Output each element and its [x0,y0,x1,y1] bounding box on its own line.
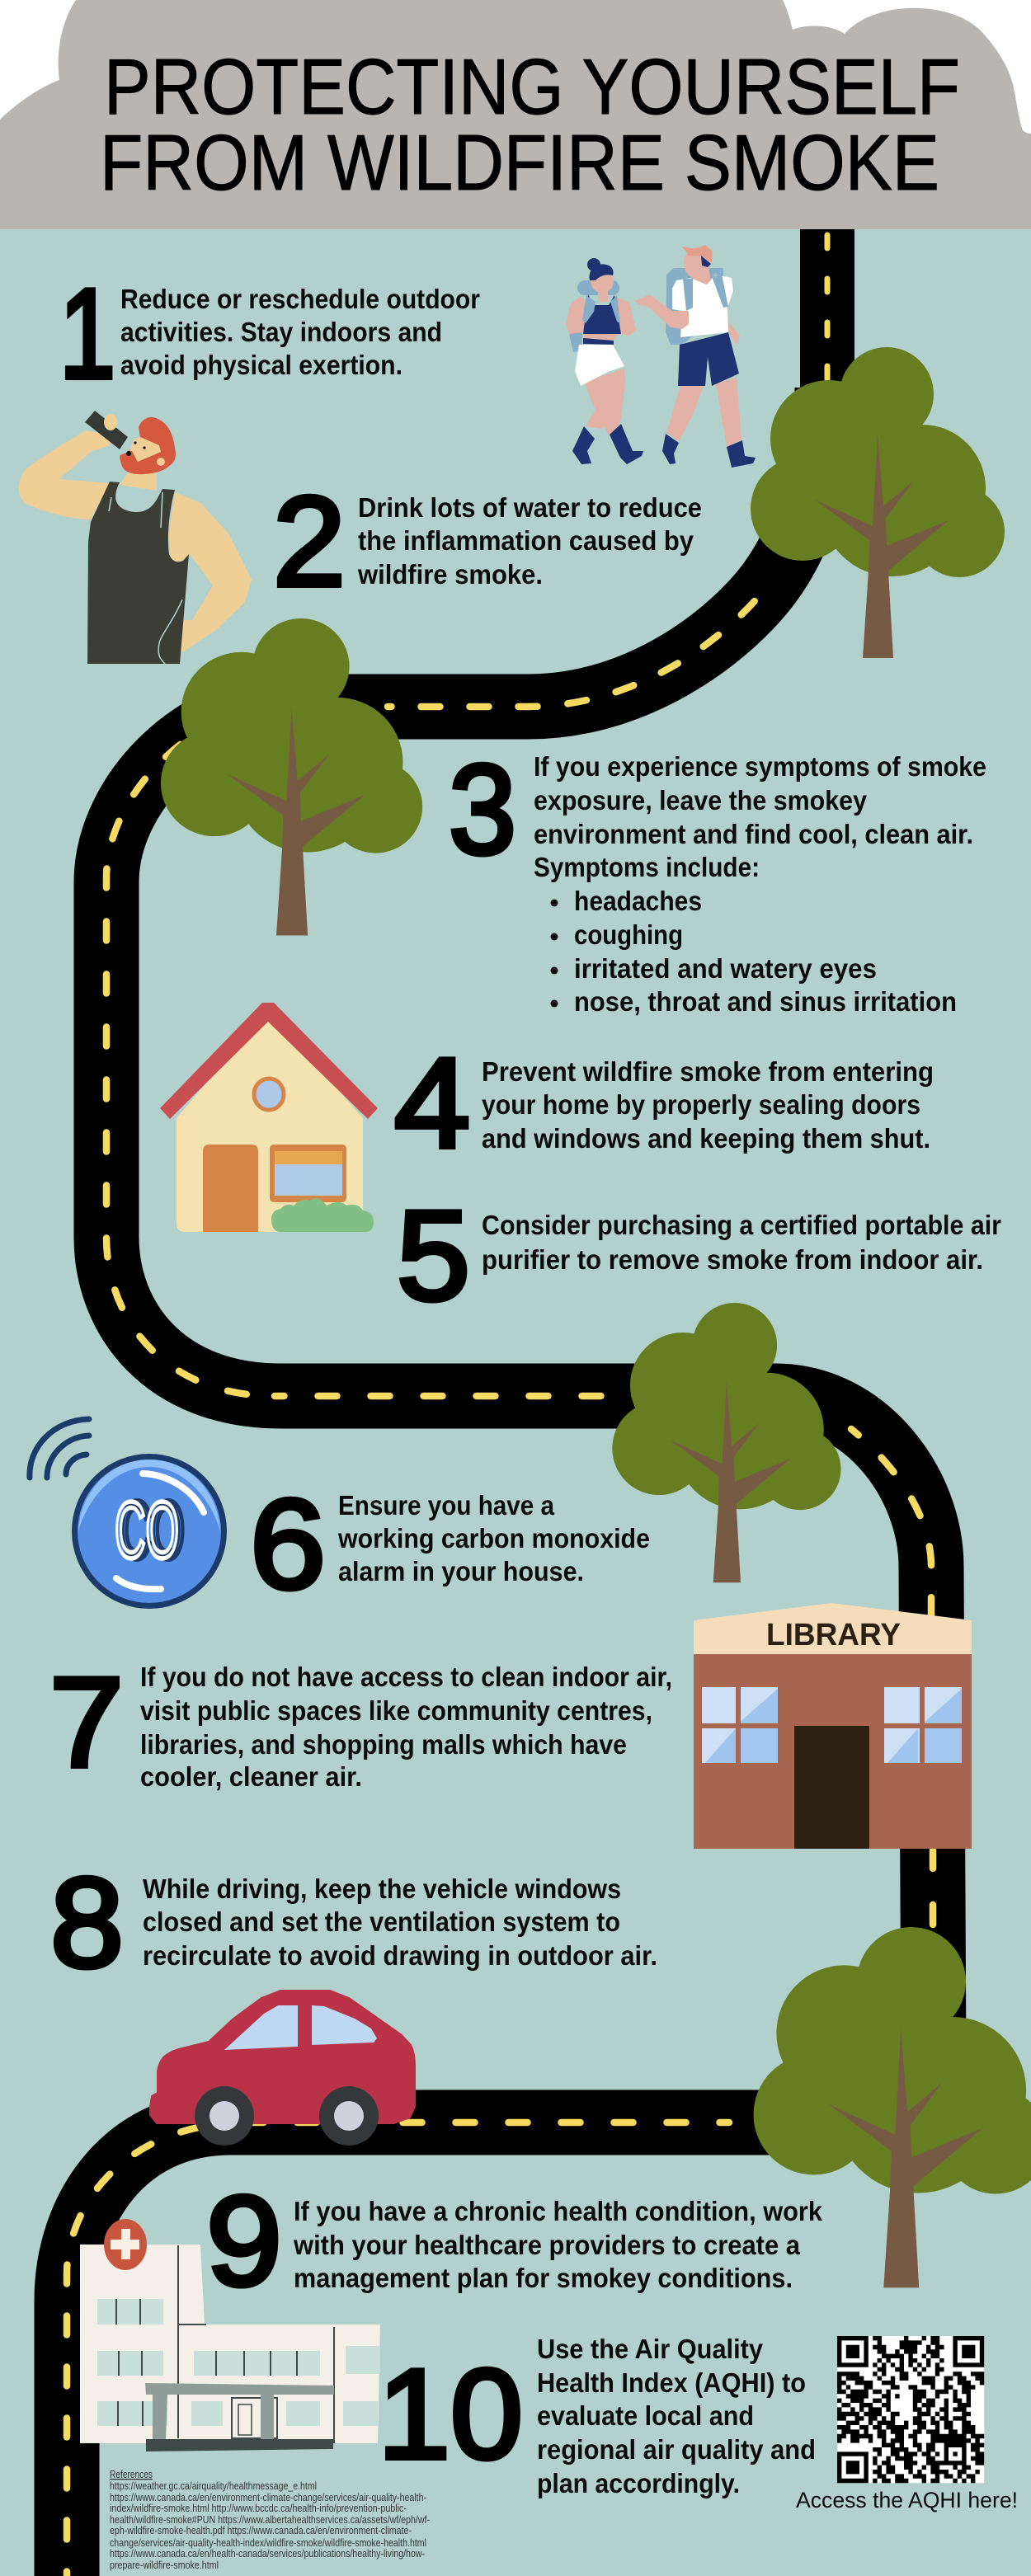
number 6: 6 [250,1473,326,1615]
CO label: CO [120,1485,185,1575]
raised arm [18,430,113,519]
wheels [195,2086,379,2146]
text: exposure, leave the smokey [534,785,868,816]
number 2: 2 [273,470,346,613]
symptom bullets: irritated and watery eyes [574,953,877,984]
hospital cross sign [104,2219,147,2270]
step 7 [49,1651,672,1793]
text: avoid physical exertion. [120,350,403,380]
step 5 [397,1184,1001,1327]
title: FROM WILDFIRE SMOKE [100,119,939,207]
road centre dashes [67,235,933,2576]
step 6 [250,1473,650,1615]
library sign: LIBRARY [766,1618,901,1652]
step 8 [50,1851,657,1994]
text [337,1490,650,1586]
text: cooler, cleaner air. [140,1761,362,1792]
right window [884,1687,962,1763]
symptom bullets [551,886,957,1017]
head [120,417,176,474]
text [537,2334,816,2498]
text: purifier to remove smoke from indoor air. [482,1244,983,1275]
man hiker [635,245,756,468]
references: eph-wildfire-smoke-health.pdf https://www.canada.ca/en/environment-climate- [110,2524,412,2536]
text: Prevent wildfire smoke from entering [482,1056,934,1087]
text: alarm in your house. [338,1556,584,1586]
references: https://weather.gc.ca/airquality/healthmessage_e.html [110,2480,317,2492]
text: and windows and keeping them shut. [482,1123,930,1154]
icon: red car [150,1991,415,2146]
number 8: 8 [50,1851,124,1994]
number 3: 3 [449,738,516,881]
references: change/services/air-quality-health-index/wildfire-smoke/wildfire-smoke-health.html [110,2536,426,2549]
number 4: 4 [394,1032,470,1174]
icon: hikers [566,245,756,468]
text: management plan for smokey conditions. [294,2263,793,2293]
references: index/wildfire-smoke.html http://www.bccdc.ca/health-info/prevention-public- [110,2502,407,2514]
number 1: 1 [59,262,115,405]
title [100,43,960,207]
text: If you have a chronic health condition, work [294,2196,823,2226]
text [143,1873,657,1971]
number 10: 10 [378,2343,523,2485]
number 5: 5 [397,1184,470,1327]
tree 3 [612,1303,841,1582]
symptom bullets: coughing [574,919,683,950]
text: While driving, keep the vehicle windows [143,1873,621,1904]
hip arm [159,492,252,651]
text: Symptoms include: [534,852,760,882]
tank top [87,482,189,664]
step 3 [449,738,986,1017]
step 9 [206,2169,823,2312]
text: the inflammation caused by [358,525,694,556]
entrance [145,2383,334,2451]
text: libraries, and shopping malls which have [140,1729,627,1760]
references: prepare-wildfire-smoke.html [110,2559,219,2571]
symptom bullets: headaches [574,886,702,916]
text: plan accordingly. [537,2468,740,2498]
neck [120,470,157,491]
text [120,284,480,380]
frame lines [116,2245,334,2443]
icon: man drinking [18,411,252,664]
step 10 [378,2334,816,2498]
text: If you experience symptoms of smoke [534,751,986,782]
text: activities. Stay indoors and [120,317,442,347]
text: your home by properly sealing doors [482,1089,920,1120]
CO label [115,1485,185,1575]
text: Ensure you have a [338,1490,555,1521]
winding road [67,229,934,2576]
text [293,2196,823,2293]
step 4 [394,1032,934,1174]
number 9: 9 [206,2169,282,2312]
text [357,492,702,590]
CO label: CO [115,1485,179,1575]
tree 4 [754,1927,1031,2287]
text: Use the Air Quality [537,2334,764,2364]
icon: house [160,1003,378,1232]
windows [97,2299,380,2426]
header smoke cloud [0,0,1031,229]
text: regional air quality and [537,2434,816,2465]
step 2 [273,470,702,613]
door [794,1726,869,1849]
woman hiker [566,258,643,464]
text: evaluate local and [537,2400,754,2431]
text [534,751,986,882]
references: References [110,2468,153,2480]
text: working carbon monoxide [337,1523,650,1554]
references: health/wildfire-smoke#PUN https://www.albertahealthservices.ca/assets/wf/eph/wf- [110,2513,430,2526]
tree 1 [751,347,1005,658]
text: If you do not have access to clean indoor air, [140,1662,672,1692]
references: https://www.canada.ca/en/health-canada/services/publications/healthy-living/how- [110,2547,425,2560]
step 1 [59,262,480,405]
bottle [85,411,128,449]
windows [224,2005,377,2050]
text: Reduce or reschedule outdoor [120,284,480,314]
icon: hospital [80,2219,380,2451]
references: https://www.canada.ca/en/environment-climate-change/services/air-quality-health- [110,2491,426,2503]
text: recirculate to avoid drawing in outdoor air. [143,1940,657,1971]
text: Drink lots of water to reduce [358,492,702,523]
QR caption: Access the AQHI here! [796,2488,1018,2513]
text: environment and find cool, clean air. [534,819,973,849]
references [110,2468,430,2571]
tree 2 [161,618,422,936]
text [140,1662,672,1792]
text: closed and set the ventilation system to [143,1906,620,1937]
text: Health Index (AQHI) to [537,2367,806,2398]
text: visit public spaces like community centres, [140,1695,652,1726]
text: with your healthcare providers to create a [293,2230,801,2260]
number 7: 7 [49,1651,124,1793]
text: Consider purchasing a certified portable air [482,1210,1001,1240]
signal arcs [30,1419,89,1478]
icon: carbon monoxide alarm [30,1419,224,1606]
text: wildfire smoke. [357,559,543,590]
symptom bullets: nose, throat and sinus irritation [574,986,957,1017]
text [482,1210,1001,1275]
left window [702,1687,778,1763]
icon: library [694,1603,972,1849]
text [482,1056,934,1154]
QR code [837,2336,984,2483]
